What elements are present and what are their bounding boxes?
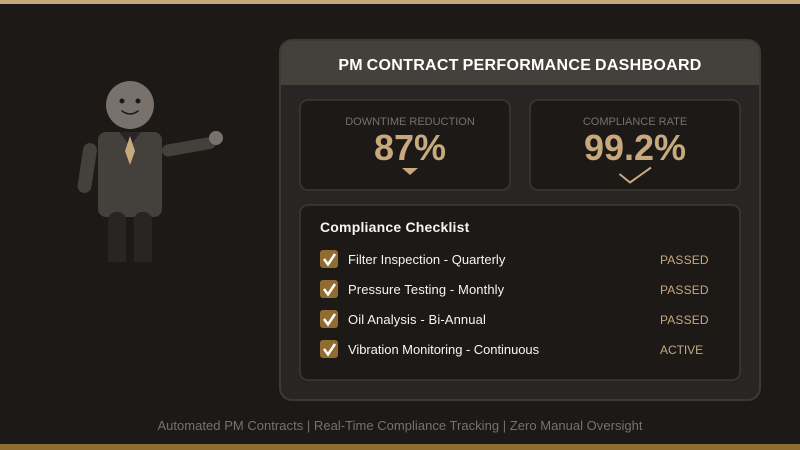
torso [98, 132, 162, 217]
row: oil analysis: Oil Analysis - Bi-Annual [348, 312, 486, 327]
row: pressure testing: PASSED [660, 283, 709, 297]
presenter figure [84, 81, 223, 262]
row: vibration monitoring: ACTIVE [660, 343, 703, 357]
right leg [134, 212, 152, 262]
footer tagline: Automated PM Contracts | Real-Time Compliance Tracking | Zero Manual Oversight [157, 418, 643, 433]
panel: dashboard [280, 40, 760, 400]
right arm [168, 143, 210, 150]
collar [119, 132, 141, 146]
smile [122, 111, 138, 114]
compliance label: COMPLIANCE RATE [583, 116, 687, 128]
compliance value: 99.2% [584, 128, 686, 168]
left arm [84, 150, 90, 186]
row: filter inspection: Filter Inspection - Quarterly [348, 252, 505, 267]
top accent bar [0, 0, 800, 4]
card: downtime reduction [300, 100, 520, 190]
checklist heading: Compliance Checklist [320, 219, 470, 235]
row: oil analysis [320, 310, 730, 328]
left eye [120, 98, 124, 104]
row: vibration monitoring: Vibration Monitoring - Continuous [348, 342, 539, 357]
icon: check mark [620, 168, 651, 182]
panel header [281, 41, 759, 85]
row: filter inspection [320, 250, 730, 268]
row: pressure testing: Pressure Testing - Monthly [348, 282, 504, 297]
row: vibration monitoring [320, 340, 730, 358]
row: pressure testing [320, 280, 730, 298]
card: compliance rate [530, 100, 740, 190]
right eye [136, 98, 140, 104]
icon: down arrow [402, 168, 418, 175]
panel background [280, 40, 760, 400]
head [106, 81, 154, 129]
tie [125, 136, 135, 165]
downtime label: DOWNTIME REDUCTION [345, 116, 475, 128]
row: oil analysis: PASSED [660, 313, 709, 327]
panel: compliance checklist [300, 205, 740, 380]
left leg [108, 212, 126, 262]
title: PM CONTRACT PERFORMANCE DASHBOARD [338, 57, 702, 74]
hand [209, 131, 223, 145]
bottom accent bar [0, 444, 800, 450]
downtime value: 87% [374, 128, 446, 168]
row: filter inspection: PASSED [660, 253, 709, 267]
